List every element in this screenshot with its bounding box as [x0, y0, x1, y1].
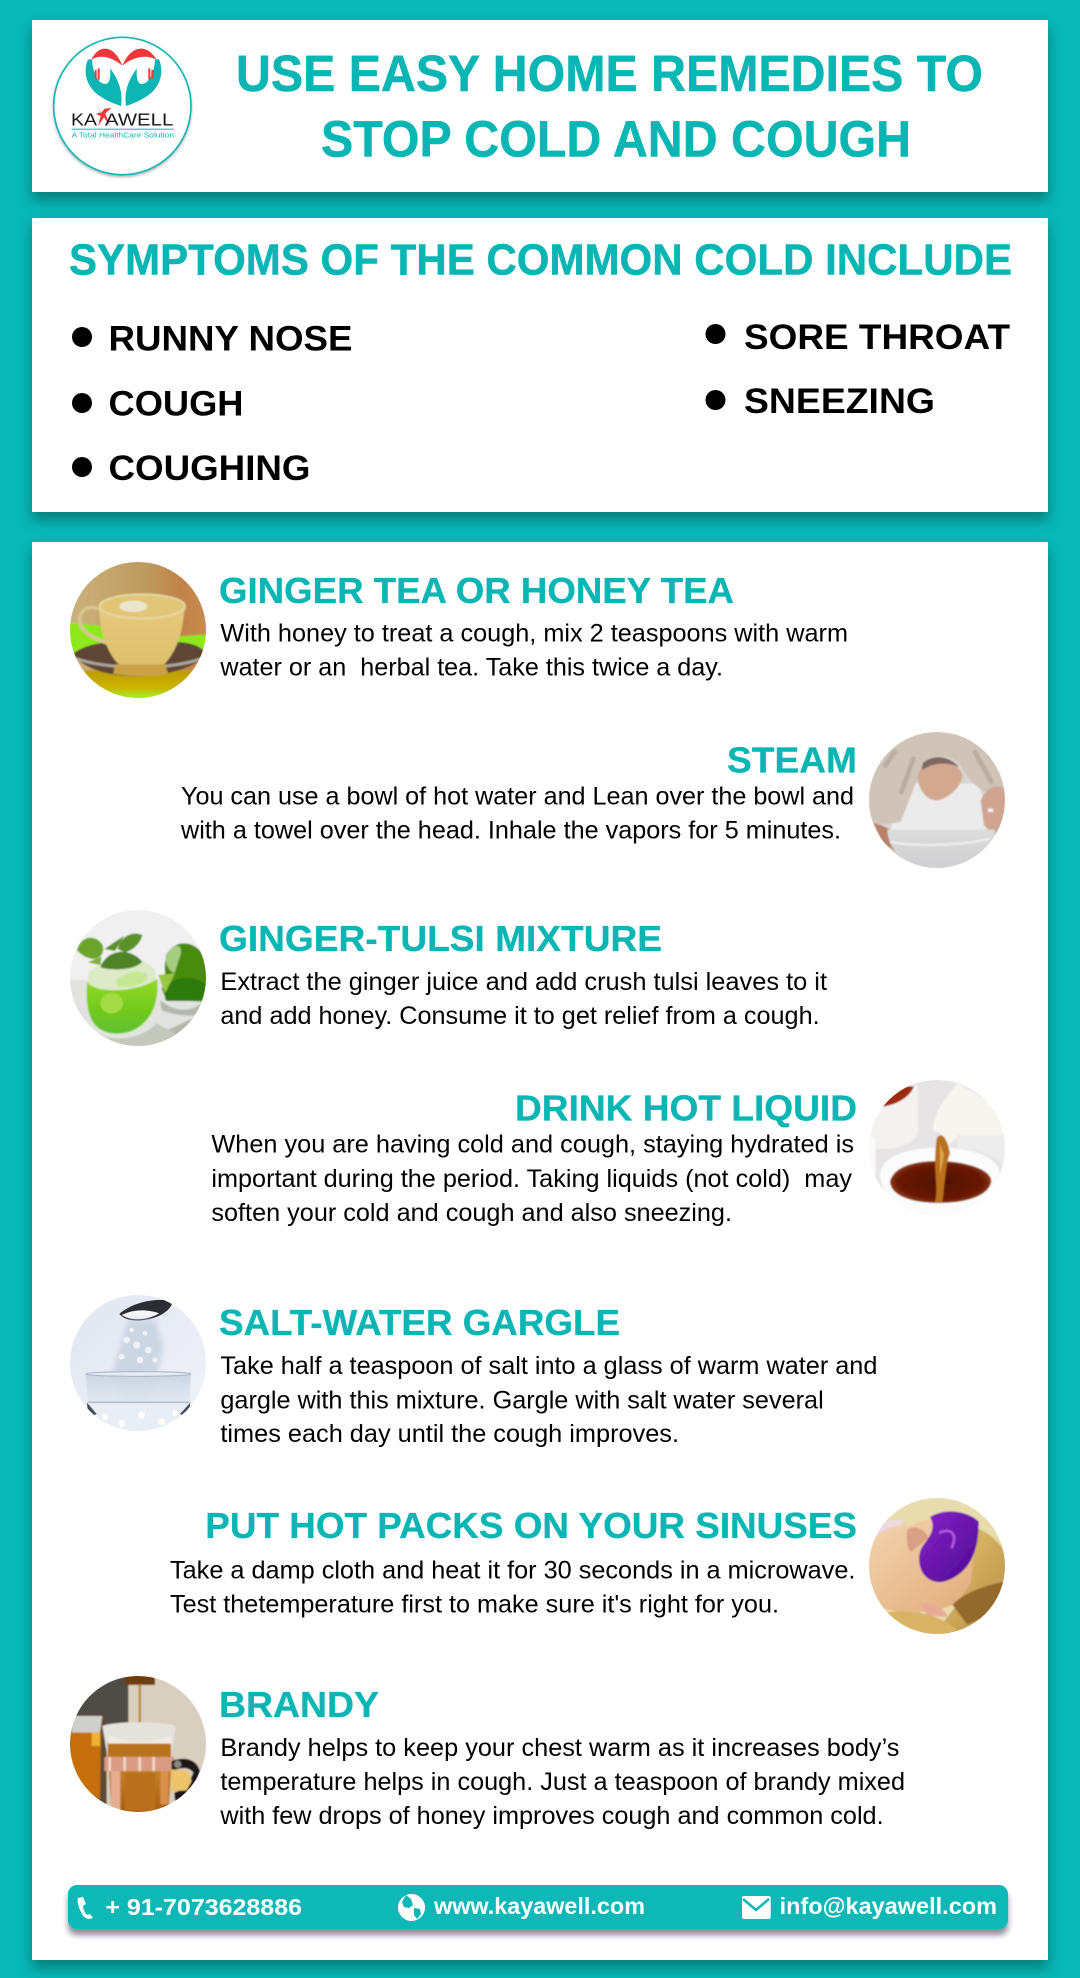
photo: salt and glass: [70, 1295, 206, 1431]
body text: When you are having cold and cough, staying hydrated is: [211, 1131, 854, 1159]
logo: Kayawell: A Total HealthCare Solution: [72, 130, 174, 139]
panel: header: [32, 20, 1048, 192]
heading: SALT-WATER GARGLE: [219, 1302, 620, 1343]
symptoms heading: SYMPTOMS OF THE COMMON COLD INCLUDE: [69, 236, 1012, 284]
body text: with a towel over the head. Inhale the vapors for 5 minutes.: [180, 816, 841, 844]
title: STOP COLD AND COUGH: [321, 110, 911, 168]
panel: symptoms: [32, 218, 1048, 512]
photo: brandy press: [70, 1676, 206, 1812]
heading: PUT HOT PACKS ON YOUR SINUSES: [205, 1505, 857, 1546]
body text: Extract the ginger juice and add crush tulsi leaves to it: [220, 968, 827, 996]
photo: tea cup: [70, 562, 206, 698]
symptom: runny nose: RUNNY NOSE: [108, 318, 352, 358]
icon: mail: [742, 1896, 771, 1919]
symptom: sore throat: SORE THROAT: [744, 317, 1010, 357]
remedy: drink hot liquid: [211, 1075, 1010, 1227]
heading: DRINK HOT LIQUID: [515, 1088, 857, 1129]
body text: [170, 1557, 855, 1619]
body text: water or an herbal tea. Take this twice a day.: [219, 654, 723, 682]
logo wordmark: KA: [71, 110, 97, 130]
title: USE EASY HOME REMEDIES TO: [236, 45, 983, 102]
body text: important during the period. Taking liquids (not cold) may: [211, 1165, 852, 1193]
remedy: ginger-tulsi: [65, 905, 827, 1051]
logo: Kayawell: [54, 37, 191, 175]
photo: steam bowl: [869, 732, 1005, 868]
body text: With honey to treat a cough, mix 2 teaspoons with warm: [220, 620, 848, 648]
body text: [220, 968, 827, 1030]
body text: soften your cold and cough and also sneezing.: [211, 1199, 732, 1227]
heading: GINGER TEA OR HONEY TEA: [219, 570, 734, 611]
title: [236, 45, 983, 168]
body text: [180, 782, 854, 844]
logo hands: [86, 59, 161, 106]
footer contact bar: [68, 1885, 1008, 1929]
body text: gargle with this mixture. Gargle with salt water several: [220, 1386, 824, 1414]
remedy: brandy: [65, 1671, 905, 1830]
icon: phone: [78, 1897, 93, 1919]
body text: Test thetemperature first to make sure it's right for you.: [170, 1591, 779, 1619]
body text: times each day until the cough improves.: [220, 1420, 679, 1448]
panel: remedies: [32, 542, 1048, 1960]
body text: You can use a bowl of hot water and Lean over the bowl and: [181, 782, 854, 810]
body text: [219, 620, 848, 682]
remedy: salt-water gargle: [65, 1290, 877, 1448]
body text: Take a damp cloth and heat it for 30 seconds in a microwave.: [170, 1557, 855, 1585]
symptom: sneezing: SNEEZING: [744, 381, 935, 421]
email: info@kayawell.com: [780, 1893, 997, 1919]
body text: and add honey. Consume it to get relief from a cough.: [220, 1002, 820, 1030]
remedy: hot packs: [170, 1493, 1010, 1639]
photo: eye pack: [869, 1498, 1005, 1634]
body text: with few drops of honey improves cough and common cold.: [219, 1802, 884, 1830]
remedy: ginger tea: [65, 557, 848, 703]
phone number: + 91-7073628886: [105, 1894, 302, 1920]
heading: GINGER-TULSI MIXTURE: [219, 918, 662, 959]
body text: temperature helps in cough. Just a teaspoon of brandy mixed: [220, 1768, 905, 1796]
symptom: cough: COUGH: [108, 384, 244, 424]
icon: globe: [398, 1894, 425, 1921]
heading: BRANDY: [219, 1684, 379, 1725]
body text: [219, 1734, 905, 1830]
website: www.kayawell.com: [433, 1893, 645, 1919]
body text: [220, 1352, 877, 1448]
symptom: coughing: COUGHING: [108, 448, 310, 488]
logo: Kayawell: AWELL: [105, 110, 173, 130]
body text: Brandy helps to keep your chest warm as it increases body’s: [220, 1734, 899, 1762]
logo heart: [91, 49, 157, 66]
photo: pouring tea: [870, 1080, 1005, 1204]
body text: Take half a teaspoon of salt into a glass of warm water and: [220, 1352, 877, 1380]
heading: STEAM: [727, 740, 857, 781]
body text: [211, 1131, 854, 1227]
remedy: steam: [180, 727, 1010, 873]
photo: green drink: [70, 910, 206, 1046]
